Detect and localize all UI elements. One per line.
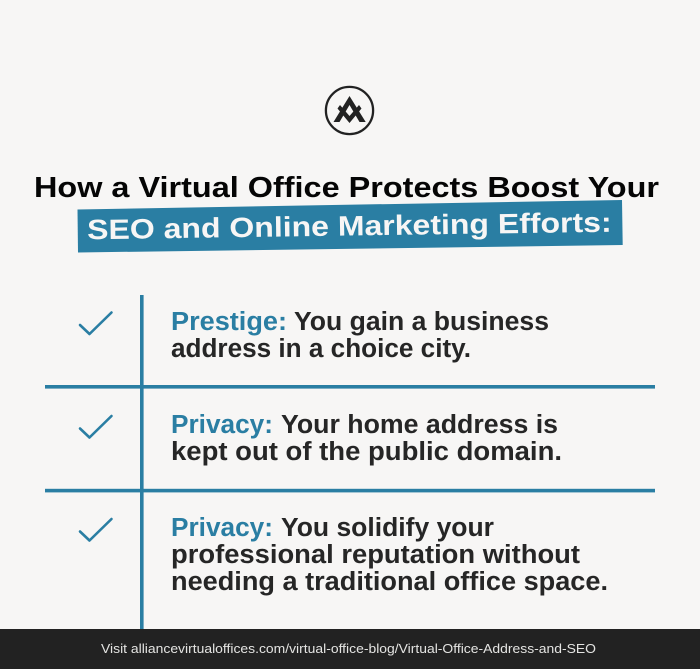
row 2 text: kept out of the public domain. bbox=[171, 438, 562, 466]
row 1 text: You gain a business bbox=[294, 308, 549, 336]
row 1: prestige bbox=[80, 308, 549, 363]
row 3: privacy reputation bbox=[80, 514, 608, 596]
row 2 text: Your home address is bbox=[281, 411, 558, 439]
row 3 text: needing a traditional office space. bbox=[171, 568, 608, 596]
table grid lines bbox=[45, 295, 655, 629]
icon: check mark 1 bbox=[80, 312, 112, 334]
row 3 text: professional reputation without bbox=[171, 541, 581, 569]
row 3 text: Privacy: bbox=[171, 514, 273, 542]
row 1 text: Prestige: bbox=[171, 308, 287, 336]
footer url text: Visit alliancevirtualoffices.com/virtual-office-blog/Virtual-Office-Address-and-SEO bbox=[101, 642, 596, 656]
icon: check mark 2 bbox=[80, 416, 112, 438]
row 2 text bbox=[171, 411, 562, 466]
title: How a Virtual Office Protects Boost Your bbox=[34, 172, 659, 204]
title highlight banner bbox=[78, 200, 623, 252]
row 3 text bbox=[171, 514, 608, 596]
icon: logo bbox=[326, 87, 373, 134]
icon: check mark 3 bbox=[80, 519, 112, 540]
row 2: privacy home address bbox=[80, 411, 562, 466]
banner text: SEO and Online Marketing Efforts: bbox=[87, 207, 612, 245]
row 1 text bbox=[171, 308, 549, 363]
row 2 text: Privacy: bbox=[171, 411, 273, 439]
footer bar bbox=[0, 629, 700, 669]
row 1 text: address in a choice city. bbox=[171, 335, 471, 363]
row 3 text: You solidify your bbox=[281, 514, 494, 542]
